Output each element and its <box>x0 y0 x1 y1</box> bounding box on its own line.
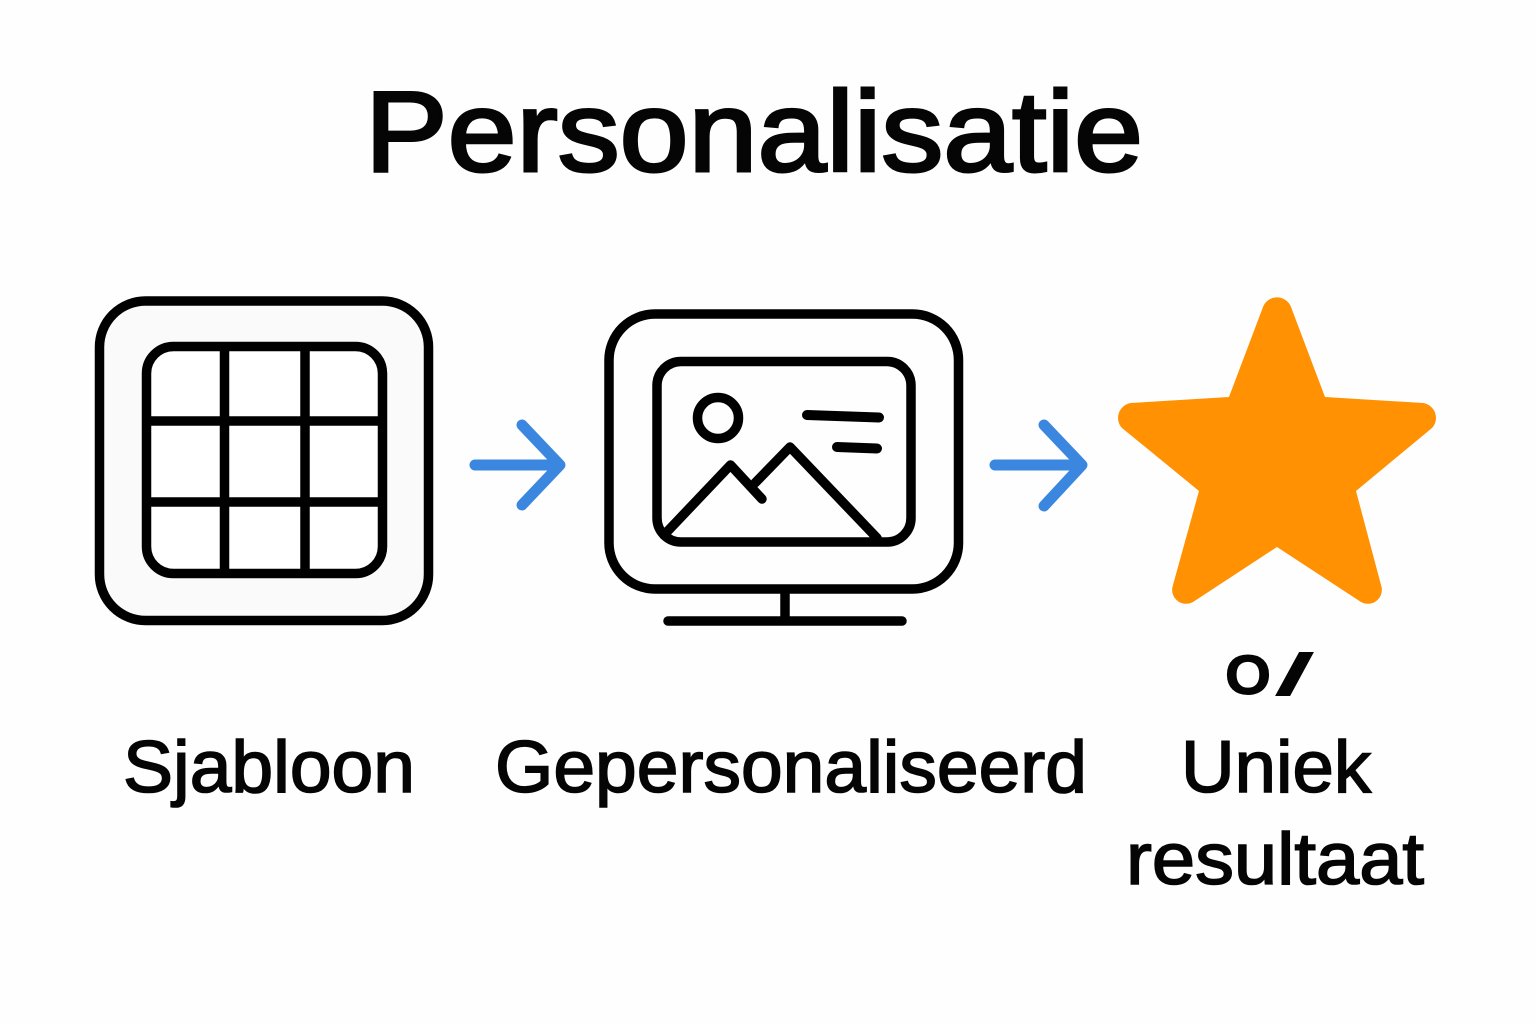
glyph mark above unique result: O <box>1225 643 1271 706</box>
icon: template grid <box>100 301 428 620</box>
label: unique result: resultaat <box>1126 819 1424 900</box>
label: template: Sjabloon <box>123 727 415 808</box>
arrow: template to personalised <box>475 425 560 505</box>
label: unique result <box>1126 727 1424 900</box>
glyph mark above unique result <box>1225 643 1311 706</box>
label: unique result: Uniek <box>1181 727 1372 808</box>
icon: orange star <box>1118 297 1436 604</box>
title: Personalisatie <box>365 69 1143 196</box>
icon: monitor with personalised image <box>609 314 958 621</box>
label: personalised: Gepersonaliseerd <box>495 727 1087 808</box>
glyph mark above unique result: / <box>1279 643 1311 706</box>
arrow: personalised to unique result <box>995 425 1082 506</box>
